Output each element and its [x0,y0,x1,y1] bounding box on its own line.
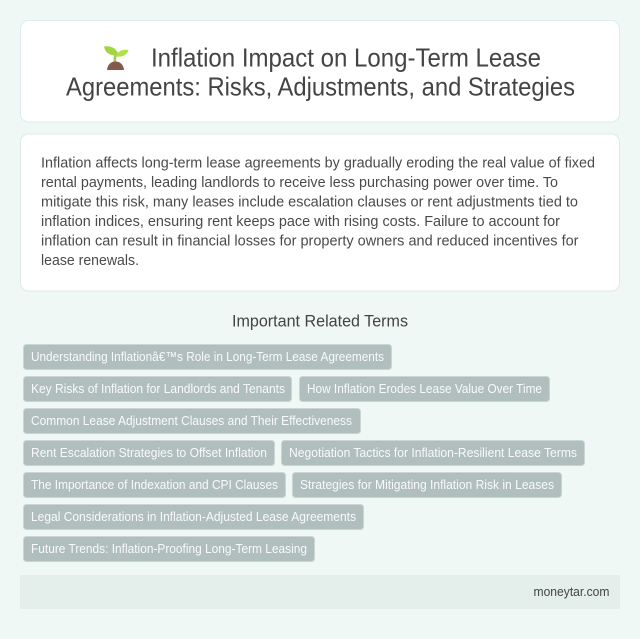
chip: mitigation strategies: Strategies for Mitigating Inflation Risk in Leases [300,477,554,492]
summary paragraph: Inflation affects long-term lease agreements by gradually eroding the real value of fixed [41,154,595,172]
chip: indexation [24,472,286,498]
footer source text: moneytar.com [534,584,610,599]
chip: negotiation tactics [282,440,584,466]
chip: adjustment clauses [24,408,360,434]
chip: key risks [24,376,292,402]
footer bar [20,575,620,609]
summary paragraph: inflation can result in financial losses for property owners and reduced incentives for [41,232,578,250]
summary paragraph [41,154,595,269]
title line 2: Agreements: Risks, Adjustments, and Strategies [66,72,575,102]
summary paragraph: lease renewals. [41,252,139,269]
panel: title card [20,20,620,122]
summary paragraph: rental payments, leading landlords to receive less purchasing power over time. To [41,174,558,191]
chip: legal considerations: Legal Considerations in Inflation-Adjusted Lease Agreements [31,509,356,524]
chip: mitigation strategies [292,472,562,498]
title line 1: Inflation Impact on Long-Term Lease [151,42,541,72]
chip: understanding inflation [24,344,392,370]
chip: rent escalation: Rent Escalation Strategies to Offset Inflation [31,445,267,460]
chip: adjustment clauses: Common Lease Adjustment Clauses and Their Effectiveness [31,413,352,428]
heading: important related terms: Important Related Terms [232,312,408,330]
chip: legal considerations [24,504,364,530]
panel: summary card [20,134,620,291]
chip: indexation: The Importance of Indexation and CPI Clauses [31,477,278,492]
chip: negotiation tactics: Negotiation Tactics for Inflation-Resilient Lease Terms [289,445,577,460]
icon: seedling [104,46,128,70]
chip: future trends: Future Trends: Inflation-Proofing Long-Term Leasing [31,541,307,556]
summary paragraph: inflation indices, ensuring rent keeps pace with rising costs. Failure to account for [41,213,560,230]
chip: key risks: Key Risks of Inflation for Landlords and Tenants [31,381,285,396]
chip: future trends [24,536,314,562]
chip: understanding inflation: Understanding Inflationâ€™s Role in Long-Term Lease Agreements [31,349,384,364]
chip: lease value erosion [300,376,550,402]
summary paragraph: mitigate this risk, many leases include escalation clauses or rent adjustments tied to [41,194,578,210]
chip: lease value erosion: How Inflation Erodes Lease Value Over Time [307,381,542,396]
chip: rent escalation [24,440,274,466]
panel: related term chips [24,344,584,562]
